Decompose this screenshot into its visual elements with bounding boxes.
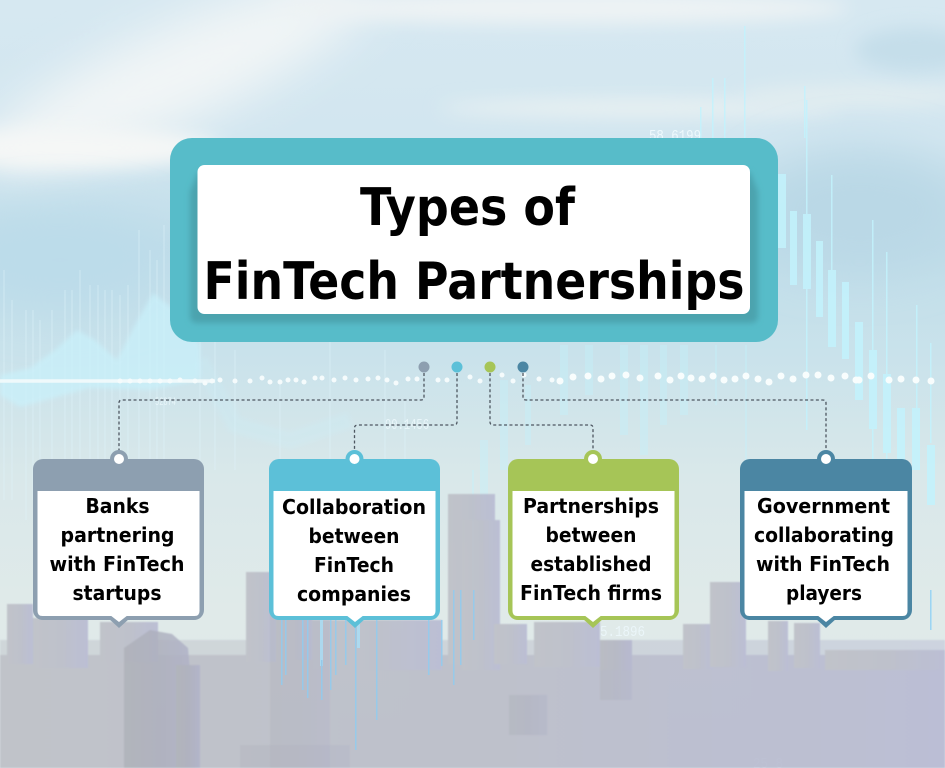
card text: [754, 494, 894, 605]
card text: collaborating: [754, 523, 894, 547]
card text: [50, 494, 184, 605]
four coloured connector dots: [418, 362, 528, 372]
card text: between: [546, 523, 636, 547]
card: partnerships between established firms: [508, 450, 679, 628]
card text: FinTech firms: [520, 581, 662, 605]
card text: companies: [297, 582, 411, 606]
title panel: [170, 138, 778, 342]
background: numeric ticker digits: 52874: [155, 397, 176, 409]
background: blue light streaks over city: [281, 590, 932, 750]
background: faint chart wave and volume lines, left: [0, 225, 405, 520]
title text: [204, 178, 744, 312]
background: faint bars under title: [472, 345, 932, 630]
card text: Government: [757, 494, 890, 518]
connector lines from dots to cards: [119, 373, 826, 452]
card text: with FinTech: [756, 552, 890, 576]
card: banks partnering: [33, 450, 204, 628]
background: city skyline: [0, 494, 945, 768]
background: candlestick bars, right: [700, 26, 935, 505]
card text: [282, 495, 426, 606]
card text: FinTech: [314, 553, 394, 577]
title text: FinTech Partnerships: [204, 252, 744, 312]
card text: partnering: [60, 523, 174, 547]
card text: Banks: [86, 494, 150, 518]
card text: [520, 494, 662, 605]
card text: Partnerships: [523, 494, 659, 518]
card text: startups: [72, 581, 162, 605]
background: numeric ticker digits: 5.1896: [600, 624, 645, 641]
background: white data dots line: [0, 375, 931, 383]
card text: players: [786, 581, 862, 605]
card: collaboration between fintech companies: [269, 450, 440, 628]
card text: between: [308, 524, 400, 548]
background: numeric ticker digits: 58 6199: [649, 128, 701, 145]
background: numeric ticker digits: [155, 128, 783, 768]
title text: Types of: [360, 178, 576, 238]
card: government collaborating: [740, 450, 912, 628]
background: numeric ticker digits: 90.1456: [385, 417, 429, 434]
card text: Collaboration: [282, 495, 426, 519]
card text: established: [530, 552, 652, 576]
card text: with FinTech: [50, 552, 184, 576]
